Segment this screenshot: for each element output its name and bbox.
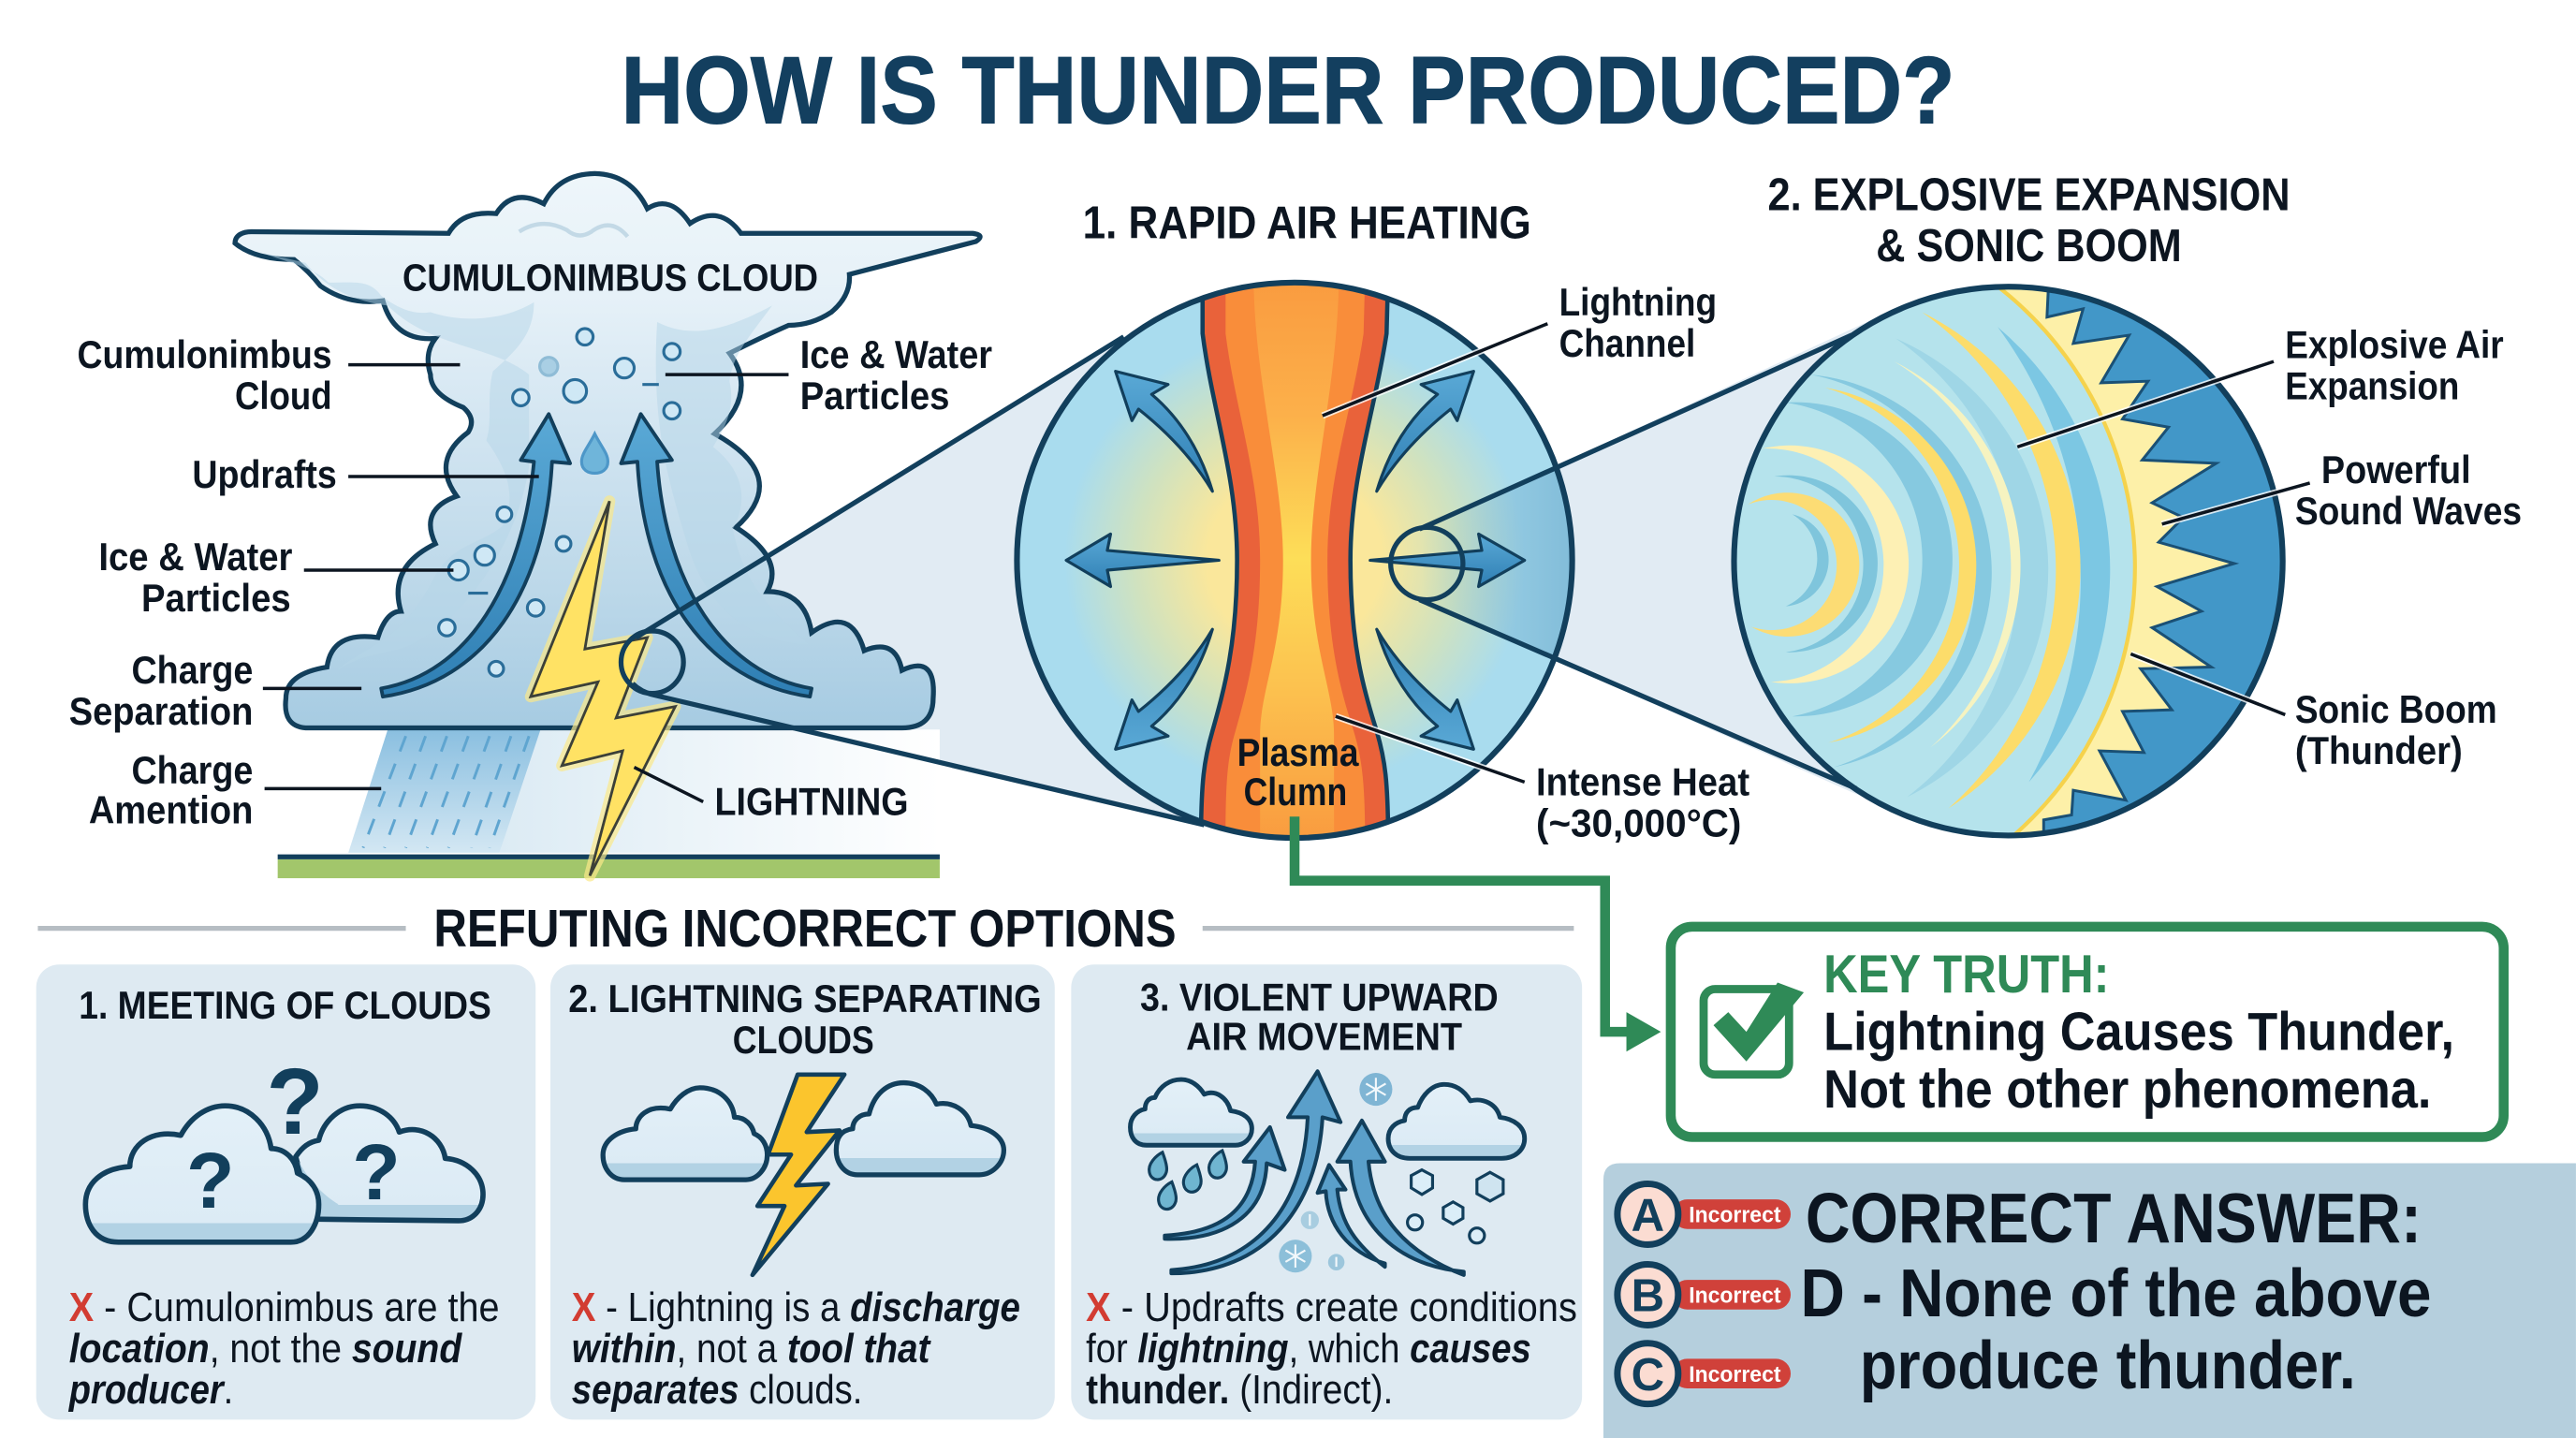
plasma label: Clumn: [1244, 770, 1347, 814]
icon: two clouds with question marks: ?: [267, 1049, 324, 1154]
label: Intense Heat: Intense Heat: [1536, 759, 1749, 803]
raindrops: [1149, 1151, 1226, 1210]
key truth text: [1823, 945, 2454, 1120]
panel: lightning separating clouds: [550, 964, 1055, 1419]
icon: two clouds with question marks: ?: [186, 1137, 234, 1225]
option A incorrect: Incorrect: [1689, 1204, 1781, 1228]
correct answer text: CORRECT ANSWER:: [1806, 1179, 2422, 1257]
label: Ice and Water Particles right: Ice & Water: [800, 332, 992, 376]
icon: checkbox: [1704, 983, 1804, 1075]
icon: two clouds with question marks: [85, 1049, 483, 1242]
label: Explosive Air Expansion: Explosive Air: [2285, 323, 2504, 367]
circle 2: explosive expansion: [1734, 279, 2300, 846]
sky below cloud: [500, 729, 940, 853]
label: Ice and Water Particles left: Particles: [141, 576, 291, 620]
label: Intense Heat: [1336, 716, 1749, 844]
label: Cumulonimbus Cloud: Cloud: [235, 374, 332, 418]
plasma label: Plasma: [1237, 730, 1359, 774]
right callouts: [1323, 280, 2522, 844]
option C incorrect: Incorrect: [1689, 1363, 1781, 1387]
diagram: cumulonimbus cloud: [235, 173, 980, 878]
icon: bolt between clouds: [603, 1075, 1003, 1275]
magnifier beam: heating circle to expansion circle: [1419, 315, 1881, 805]
icon: two clouds with question marks: ?: [352, 1128, 401, 1216]
panel text: for lightning, which causes: [1086, 1326, 1531, 1372]
label: Charge Separation: Separation: [69, 689, 253, 733]
rain shaft: [348, 729, 540, 853]
label: Updrafts: Updrafts: [192, 452, 337, 496]
title: HOW IS THUNDER PRODUCED?: [621, 37, 1955, 144]
label: Explosive Air Expansion: [2017, 323, 2504, 447]
panel text: X - Updrafts create conditions: [1086, 1284, 1577, 1330]
cloud shading: [263, 253, 534, 670]
panel heading: CLOUDS: [733, 1018, 874, 1062]
panel heading: [568, 976, 1042, 1062]
updraft arrow right: [621, 414, 812, 697]
heading: explosive expansion: [1767, 170, 2291, 271]
option B incorrect: [1617, 1264, 1791, 1325]
label: Ice and Water Particles right: [666, 332, 992, 418]
option B incorrect: B: [1632, 1271, 1664, 1322]
label: Powerful Sound Waves: [2162, 448, 2522, 533]
outward arrows: [1066, 372, 1525, 749]
updraft arrow left: [381, 414, 570, 697]
ground: [278, 855, 940, 878]
correct answer text: [1801, 1179, 2431, 1403]
option A incorrect: A: [1632, 1191, 1664, 1241]
callout: key truth: [1671, 927, 2504, 1137]
panel heading: 2. LIGHTNING SEPARATING: [568, 976, 1042, 1020]
label: Ice and Water Particles right: Particles: [800, 374, 949, 418]
label: Sonic Boom: Sonic Boom: [2295, 687, 2497, 731]
panel text: [1086, 1284, 1577, 1413]
correct answer text: D - None of the above: [1801, 1256, 2431, 1331]
panel text: thunder. (Indirect).: [1086, 1367, 1393, 1413]
label: Charge Separation: Charge: [131, 648, 253, 692]
heading: explosive expansion: 2. EXPLOSIVE EXPANSION: [1767, 170, 2291, 221]
label: Ice and Water Particles left: [98, 535, 453, 620]
label: Intense Heat: (~30,000°C): [1536, 800, 1741, 844]
magnifier beam: lightning to heating circle: [636, 320, 1216, 829]
key truth text: Not the other phenomena.: [1823, 1060, 2431, 1120]
label: Charge Amention: Amention: [89, 787, 253, 831]
label: Lightning: LIGHTNING: [714, 779, 909, 823]
section heading: refuting incorrect options: REFUTING INCORRECT OPTIONS: [433, 899, 1177, 958]
label: Lightning: [634, 768, 909, 823]
yellow shock front: [1993, 279, 2234, 838]
label: Powerful Sound Waves: Powerful: [2321, 448, 2471, 492]
label: Sonic Boom: (Thunder): [2295, 728, 2463, 772]
cloud label: CUMULONIMBUS CLOUD: [402, 257, 818, 300]
panel text: within, not a tool that: [572, 1326, 932, 1372]
magnifier lens on heating circle: [1391, 335, 1856, 788]
left callouts: [69, 332, 992, 831]
option B incorrect: Incorrect: [1689, 1284, 1781, 1309]
heading: explosive expansion: & SONIC BOOM: [1876, 221, 2182, 271]
key truth text: Lightning Causes Thunder,: [1823, 1002, 2454, 1062]
green connector arrow: [1295, 816, 1661, 1051]
label: Ice and Water Particles left: Ice & Water: [98, 535, 292, 579]
label: Sonic Boom: [2130, 654, 2497, 772]
panel: correct answer: [1603, 1164, 2576, 1438]
label: Cumulonimbus Cloud: [78, 332, 460, 418]
label: Charge Separation: [69, 648, 361, 733]
label: Charge Amention: Charge: [131, 748, 253, 792]
lightning bolt: [531, 501, 675, 875]
panel: meeting of clouds: [37, 964, 535, 1419]
label: Lightning Channel: Lightning: [1559, 280, 1717, 324]
label: Charge Amention: [89, 748, 381, 831]
option C incorrect: [1617, 1343, 1791, 1404]
panel text: separates clouds.: [572, 1367, 862, 1413]
panel text: X - Cumulonimbus are the: [69, 1284, 500, 1330]
option C incorrect: C: [1632, 1350, 1664, 1401]
panel text: [572, 1284, 1020, 1413]
panel heading: AIR MOVEMENT: [1186, 1014, 1462, 1058]
panel text: producer.: [68, 1367, 233, 1413]
panel heading: 1. MEETING OF CLOUDS: [79, 983, 491, 1027]
panel heading: 3. VIOLENT UPWARD: [1140, 975, 1499, 1019]
plasma channel: [1201, 271, 1388, 846]
dark blue outer zone: [2044, 292, 2280, 830]
ice crystals: [1408, 1170, 1503, 1243]
label: Cumulonimbus Cloud: Cumulonimbus: [78, 332, 332, 376]
correct answer text: produce thunder.: [1860, 1328, 2356, 1403]
magnifier lens on lightning: [621, 337, 1204, 825]
label: Explosive Air Expansion: Expansion: [2285, 363, 2459, 407]
panel: violent upward air movement: [1071, 964, 1582, 1419]
option A incorrect: [1617, 1183, 1791, 1244]
label: Lightning Channel: [1323, 280, 1717, 416]
icon: updrafts with ice and rain: [1131, 1071, 1525, 1275]
key truth text: KEY TRUTH:: [1823, 945, 2110, 1005]
panel heading: [1140, 975, 1499, 1058]
label: Powerful Sound Waves: Sound Waves: [2295, 489, 2522, 533]
plasma label: [1237, 730, 1359, 814]
ice and water particles: [439, 329, 681, 676]
circle 1: rapid air heating: [1017, 271, 1586, 846]
updraft arrows: [1164, 1071, 1464, 1275]
label: Lightning Channel: Channel: [1559, 321, 1695, 365]
panel text: X - Lightning is a discharge: [572, 1284, 1020, 1330]
panel text: location, not the sound: [69, 1326, 462, 1372]
panel text: [68, 1284, 500, 1413]
heading: rapid air heating: 1. RAPID AIR HEATING: [1083, 198, 1531, 248]
snowflakes: [1279, 1073, 1392, 1272]
cloud body: [235, 173, 980, 727]
